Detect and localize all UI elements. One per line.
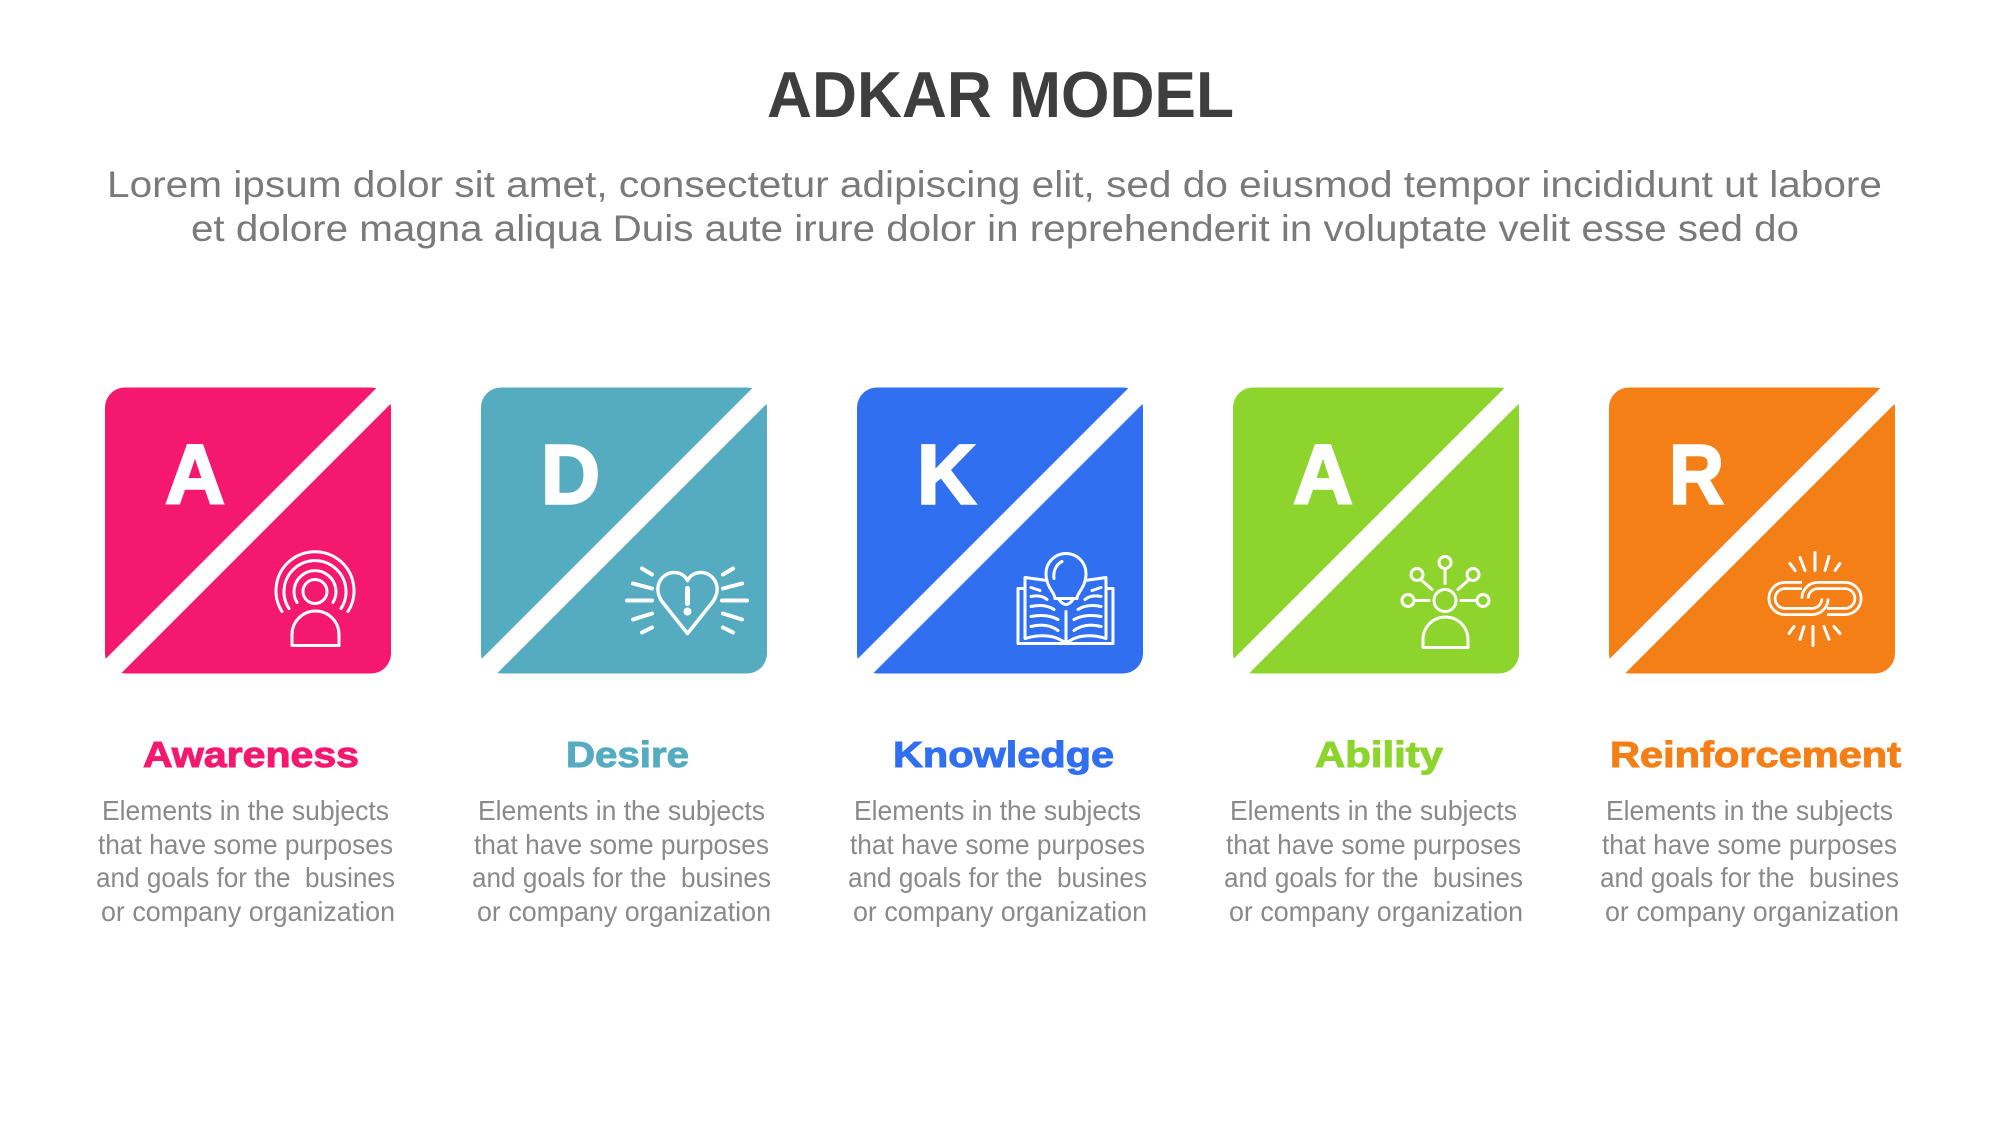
panel: Knowledge [848, 386, 1147, 927]
heading: Knowledge: Knowledge [893, 734, 1114, 775]
title: ADKAR MODEL [767, 58, 1234, 131]
icon: person with signal rings [276, 552, 354, 646]
card: A tile [103, 386, 395, 676]
description: Awareness: and goals for the busines [96, 862, 395, 893]
heading: Desire: Desire [566, 734, 689, 775]
icon: open book with light bulb [1018, 554, 1113, 644]
subtitle text block: Lorem ipsum dolor sit amet, consectetur adipiscing elit, sed do eiusmod tempor incididunt ut labore [107, 164, 1882, 205]
card: R tile [1607, 386, 1899, 676]
description: Knowledge: and goals for the busines [848, 862, 1147, 893]
description: Knowledge: that have some purposes [850, 829, 1145, 860]
card: K tile: K [917, 428, 976, 522]
panel: Ability [1224, 386, 1523, 927]
description: Awareness: Elements in the subjects [102, 795, 389, 826]
description: Awareness: that have some purposes [98, 829, 393, 860]
heading: Ability: Ability [1315, 734, 1443, 775]
description: Reinforcement: Elements in the subjects [1606, 795, 1893, 826]
icon: chain links with sparks [1772, 552, 1858, 646]
description: Reinforcement: that have some purposes [1602, 829, 1897, 860]
subtitle text block [107, 164, 1882, 249]
description: Ability: or company organization [1229, 896, 1523, 927]
panel: Desire [472, 386, 771, 927]
description: Reinforcement: or company organization [1605, 896, 1899, 927]
card: D tile: D [541, 428, 600, 522]
description: Knowledge [848, 795, 1147, 927]
icon: heart with exclamation and rays [627, 568, 747, 634]
heading: Reinforcement: Reinforcement [1610, 734, 1901, 775]
description: Reinforcement: and goals for the busines [1600, 862, 1899, 893]
description: Ability [1224, 795, 1523, 927]
description: Ability: that have some purposes [1226, 829, 1521, 860]
card: D tile [479, 386, 771, 676]
card: A tile [1231, 386, 1523, 676]
card: A tile: A [1293, 428, 1353, 522]
description: Desire: that have some purposes [474, 829, 769, 860]
description: Knowledge: Elements in the subjects [854, 795, 1141, 826]
heading: Awareness: Awareness [143, 734, 359, 775]
panel: Reinforcement [1600, 386, 1901, 927]
card: A tile: A [165, 428, 225, 522]
description: Desire: Elements in the subjects [478, 795, 765, 826]
card: R tile: R [1669, 428, 1724, 522]
description: Ability: Elements in the subjects [1230, 795, 1517, 826]
description: Awareness [96, 795, 395, 927]
card: K tile [855, 386, 1147, 676]
description: Awareness: or company organization [101, 896, 395, 927]
description: Ability: and goals for the busines [1224, 862, 1523, 893]
description: Knowledge: or company organization [853, 896, 1147, 927]
icon: person with connected nodes [1402, 556, 1489, 648]
description: Desire: and goals for the busines [472, 862, 771, 893]
description: Desire [472, 795, 771, 927]
subtitle text block: et dolore magna aliqua Duis aute irure dolor in reprehenderit in voluptate velit esse sed do [191, 208, 1799, 249]
panel: Awareness [96, 386, 395, 927]
description: Desire: or company organization [477, 896, 771, 927]
description: Reinforcement [1600, 795, 1899, 927]
